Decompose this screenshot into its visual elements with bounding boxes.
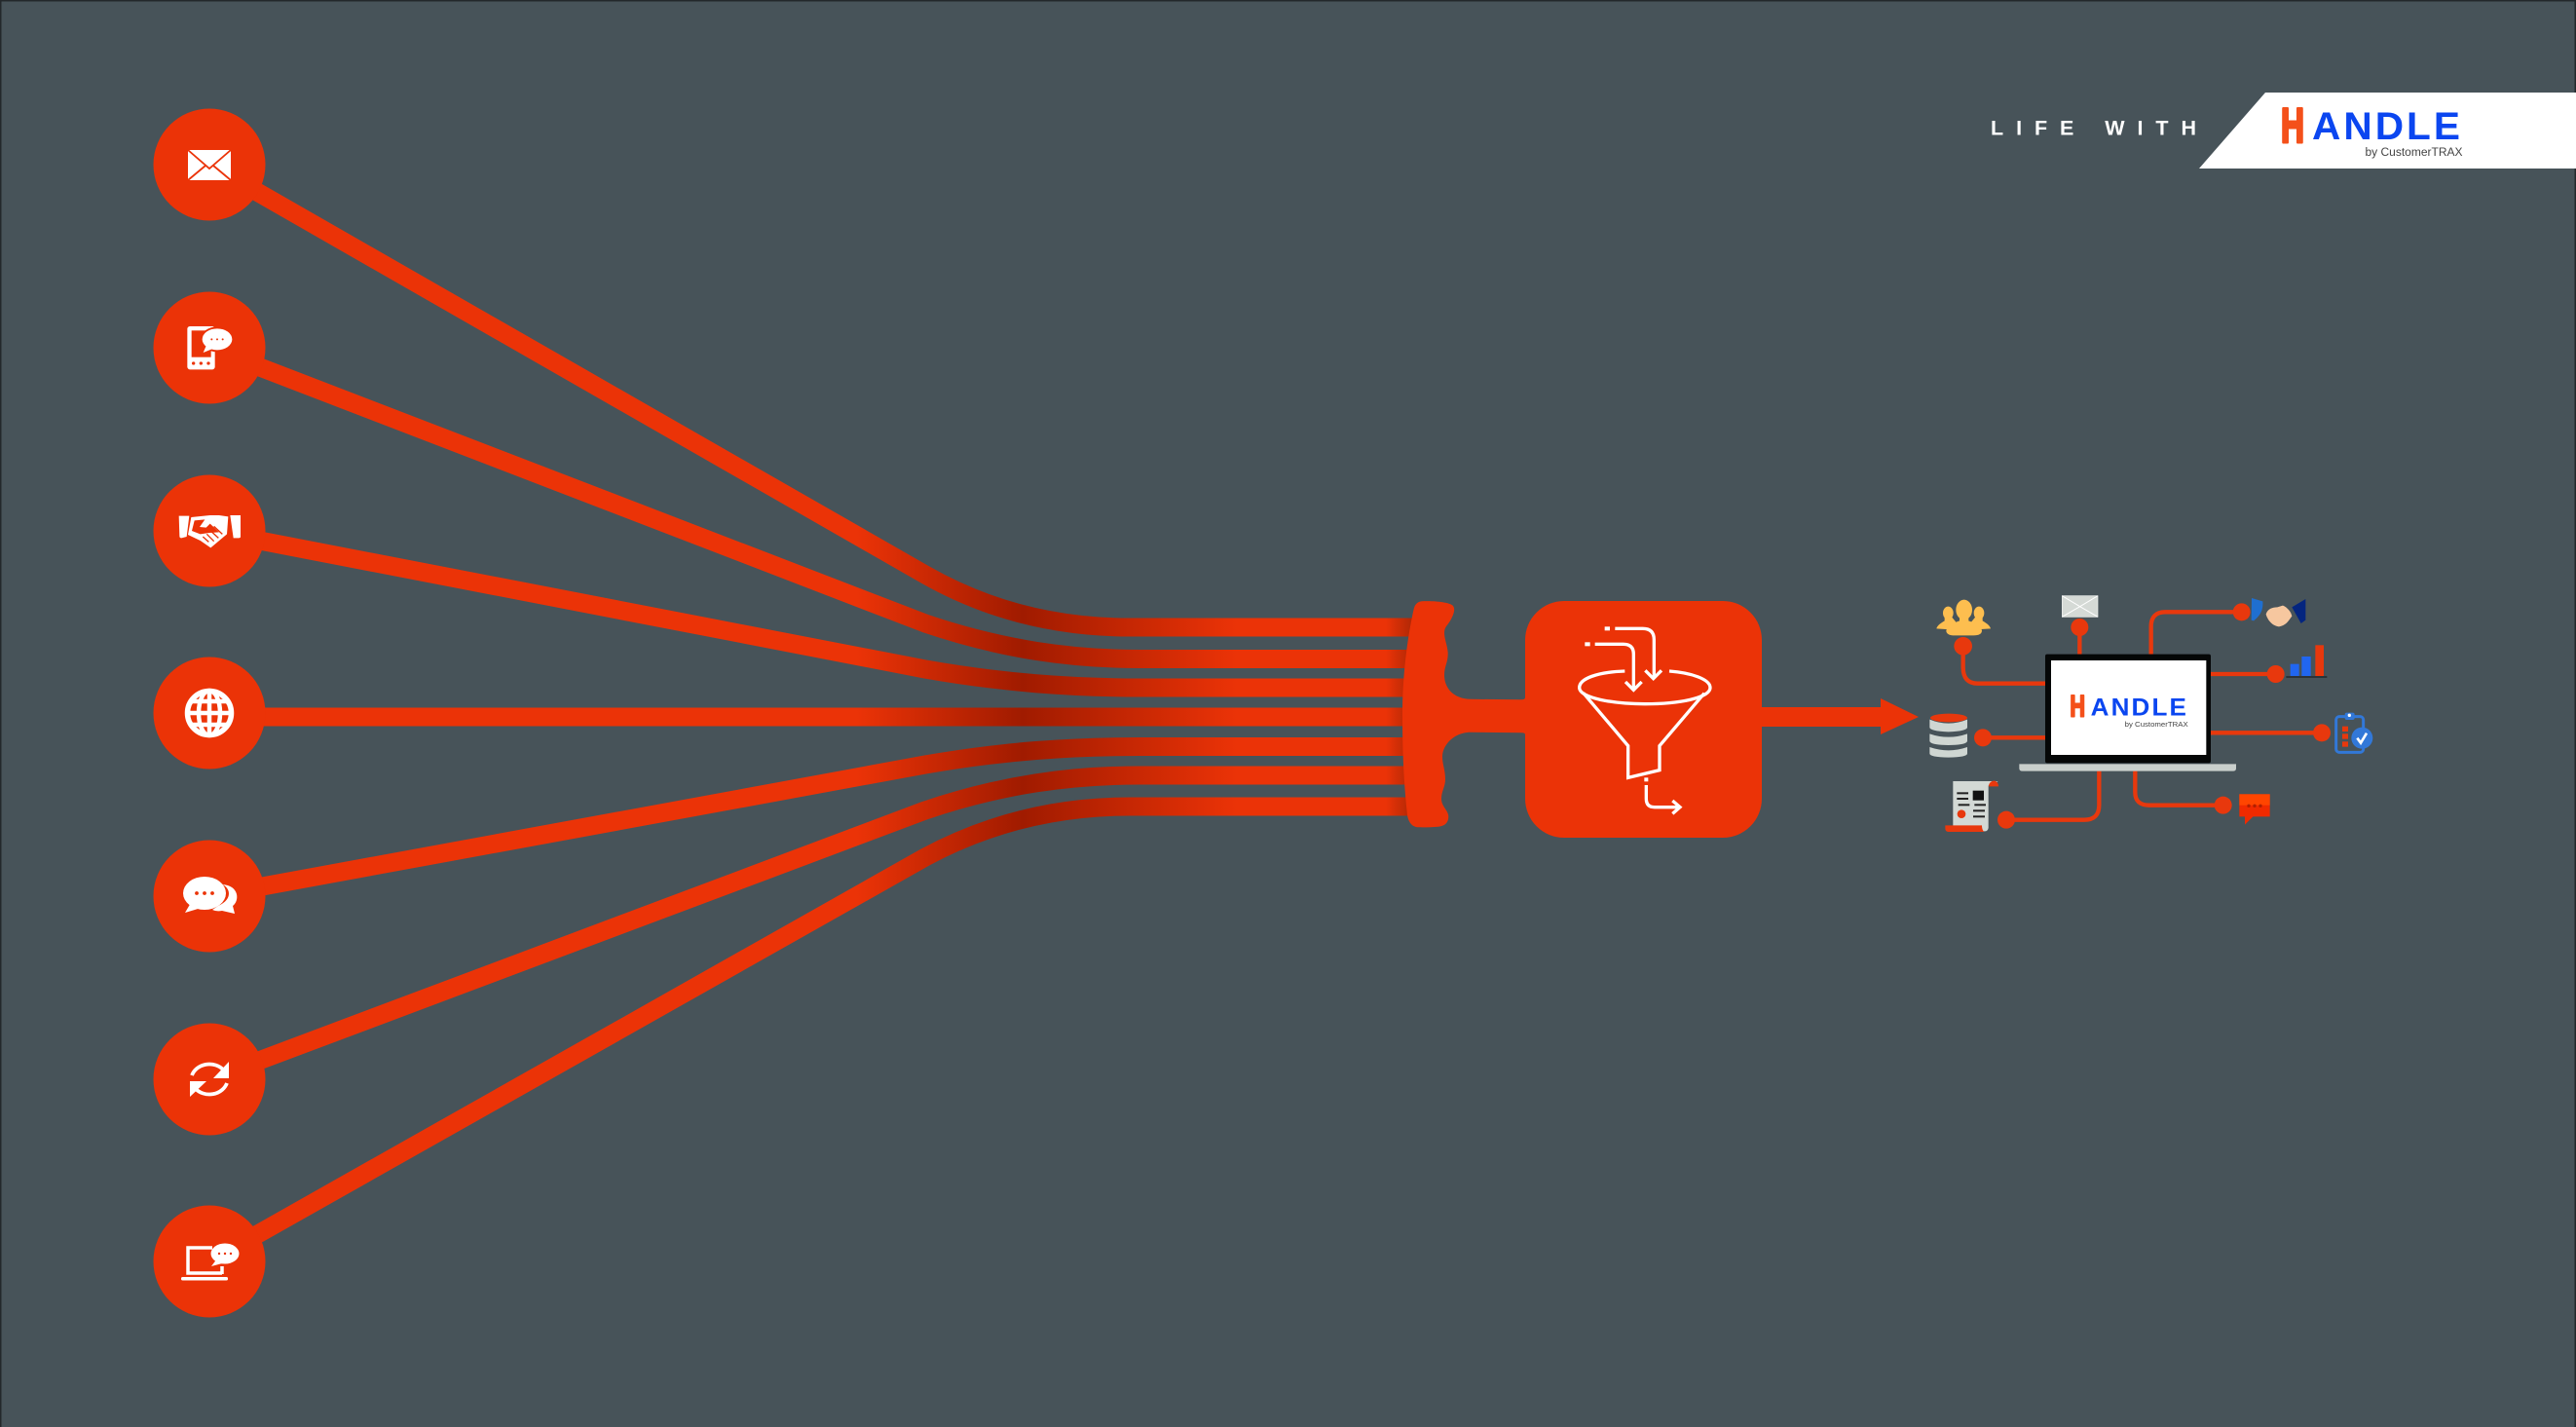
connector dots (1954, 603, 2331, 829)
icon: sync arrows (190, 1062, 229, 1097)
icon: clipboard check (2336, 713, 2372, 752)
icon: laptop with speech bubble (181, 1243, 240, 1280)
channel circle: mobile chat (154, 292, 265, 403)
icon: handshake (2252, 598, 2305, 626)
channel circle: partnership (154, 475, 265, 586)
icon: database (1929, 714, 1967, 758)
funnel box (1525, 601, 1762, 838)
icon: document scroll (1945, 781, 1998, 832)
logo: handle on screen: by CustomerTRAX (2125, 722, 2188, 729)
channel circle: sync (154, 1023, 265, 1136)
icon: envelope (188, 150, 231, 180)
icon: speech bubble (2239, 794, 2270, 825)
line: email (209, 165, 1422, 627)
channel circle: laptop chat (154, 1206, 265, 1317)
logo: handle: H (2281, 98, 2304, 153)
tagline: LIFE WITH (1991, 116, 2196, 139)
brand banner (2199, 93, 2576, 169)
line: web gradient (857, 707, 1422, 727)
logo: handle: ANDLE (2312, 105, 2463, 148)
icon: handshake (179, 515, 241, 547)
connector lines (1963, 612, 2322, 820)
channel circle: email (154, 109, 265, 220)
product network (1929, 596, 2372, 832)
line: partners (209, 531, 1422, 688)
line: web (209, 707, 1422, 727)
line: laptop chat (209, 807, 1422, 1261)
collector comb (1402, 601, 1525, 827)
logo: handle on screen: H (2070, 690, 2085, 724)
converging channel lines (209, 165, 1422, 1261)
channel circle: web (154, 657, 265, 770)
logo: handle (2281, 98, 2463, 159)
logo: handle on screen (2070, 690, 2188, 729)
icon: phone with speech bubble (187, 326, 234, 369)
icon: globe (187, 691, 232, 735)
line: sync (209, 775, 1422, 1079)
logo: handle on screen: ANDLE (2091, 695, 2188, 722)
icon: envelope (2062, 596, 2098, 617)
laptop (2019, 655, 2236, 771)
icon: funnel with arrows (1580, 626, 1710, 813)
line: chat (209, 746, 1422, 896)
line: mobile chat (209, 348, 1422, 658)
channel circle: chat (154, 840, 265, 953)
arrow: to handle platform (1762, 698, 1919, 734)
icon: people (1936, 600, 1991, 635)
icon: bar chart (2286, 645, 2327, 678)
icon: speech bubbles (183, 877, 237, 914)
logo: handle: by CustomerTRAX (2365, 147, 2463, 159)
